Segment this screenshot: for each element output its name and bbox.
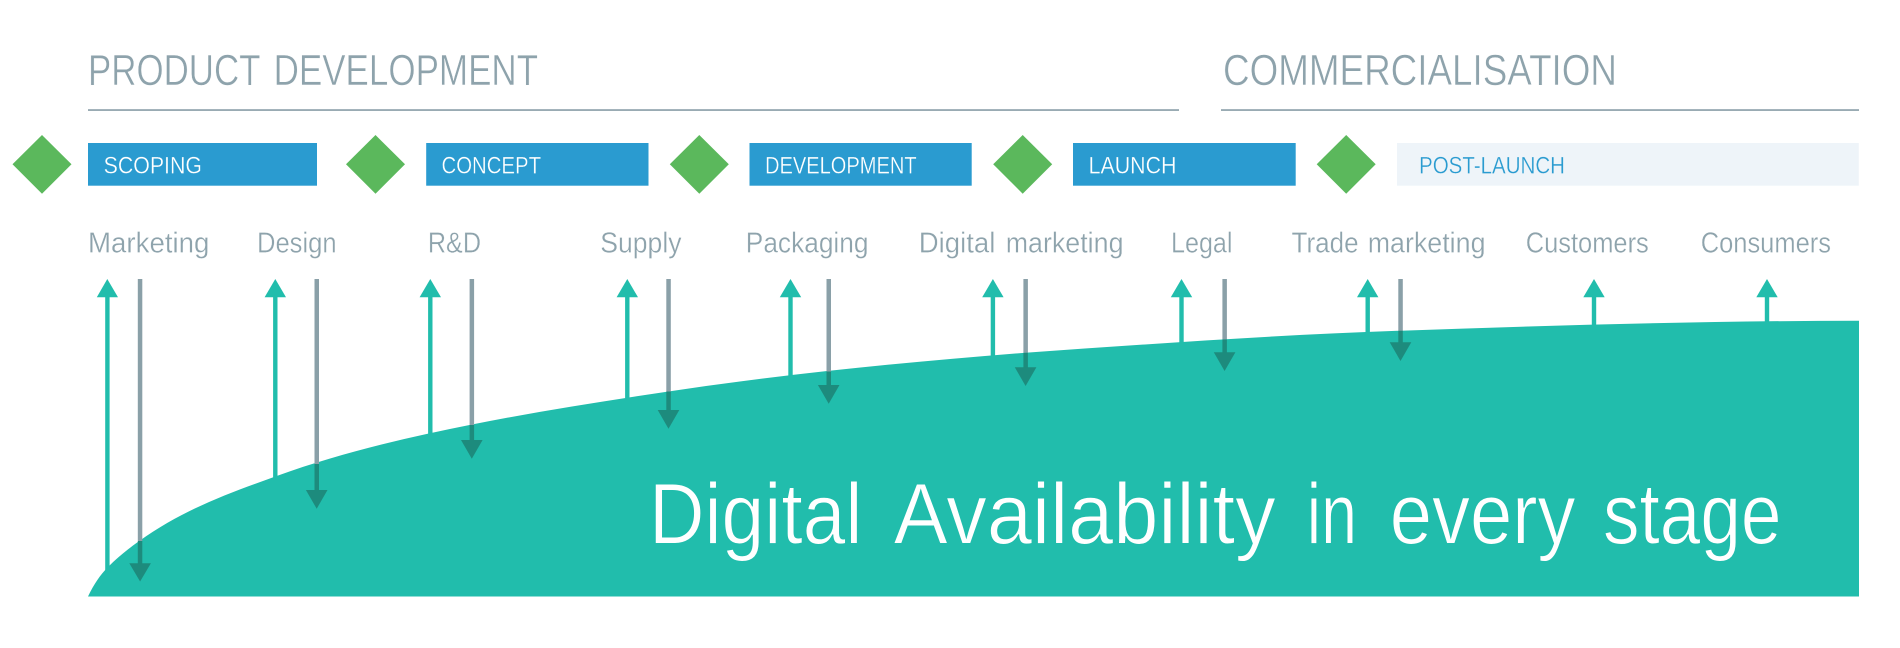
- icon: diamond gate 4: [993, 135, 1052, 194]
- label: design: Design: [257, 228, 337, 260]
- label: digital marketing: Digital: [919, 228, 995, 260]
- main statement: digital availability in every stage: Availability: [894, 466, 1276, 562]
- down arrow: marketing: [129, 279, 151, 582]
- up arrow: supply: [617, 279, 638, 402]
- icon: diamond gate 3: [670, 135, 729, 194]
- up arrow: consumers: [1756, 279, 1778, 325]
- down arrow: design: [306, 279, 328, 509]
- up arrow: trade marketing: [1357, 279, 1378, 336]
- main statement: digital availability in every stage: [649, 466, 1782, 562]
- heading: product development: DEVELOPMENT: [274, 47, 538, 95]
- stage bar: development: DEVELOPMENT: [765, 152, 917, 179]
- up arrow: marketing: [97, 279, 118, 572]
- stage bar: post-launch: [1397, 143, 1859, 186]
- down arrow: R&D: [461, 279, 483, 459]
- up arrow: legal: [1171, 279, 1192, 346]
- down arrow: packaging: [818, 279, 840, 404]
- label: packaging: Packaging: [746, 228, 868, 260]
- label: supply: Supply: [600, 228, 682, 260]
- stage bar: development: [750, 143, 972, 186]
- label: consumers: Consumers: [1701, 228, 1831, 260]
- stage bar: launch: [1073, 143, 1296, 186]
- area chart: digital availability curve: [88, 321, 1859, 596]
- heading: commercialisation: COMMERCIALISATION: [1223, 47, 1617, 95]
- label: digital marketing: [919, 228, 1124, 260]
- heading: product development: [88, 47, 1179, 111]
- heading: product development: PRODUCT: [88, 47, 260, 95]
- icon: diamond gate 1: [12, 135, 72, 194]
- label: trade marketing: Trade: [1292, 228, 1359, 260]
- stage bar: post-launch: POST-LAUNCH: [1419, 152, 1565, 179]
- label: R&D: R&D: [428, 228, 481, 260]
- label: trade marketing: [1292, 228, 1486, 260]
- down arrow: legal: [1214, 279, 1235, 371]
- down arrow: trade marketing: [1390, 279, 1411, 361]
- up arrow: customers: [1583, 279, 1605, 328]
- up arrow: digital marketing: [982, 279, 1004, 360]
- label: trade marketing: marketing: [1368, 228, 1486, 260]
- label: marketing: Marketing: [88, 228, 209, 260]
- main statement: digital availability in every stage: Digital: [649, 466, 862, 562]
- icon: diamond gate 2: [346, 135, 405, 194]
- up arrow: packaging: [780, 279, 801, 380]
- stage bar: scoping: [88, 143, 317, 186]
- stage bar: launch: LAUNCH: [1089, 152, 1176, 179]
- main statement: digital availability in every stage: stage: [1603, 466, 1782, 562]
- stage bar: concept: [426, 143, 648, 186]
- down arrow: supply: [658, 279, 679, 429]
- label: digital marketing: marketing: [1006, 228, 1124, 260]
- main statement: digital availability in every stage: in: [1307, 466, 1357, 562]
- up arrow: R&D: [420, 279, 441, 438]
- label: customers: Customers: [1526, 228, 1649, 260]
- stage bar: concept: CONCEPT: [442, 152, 541, 179]
- main statement: digital availability in every stage: every: [1390, 466, 1576, 562]
- label: legal: Legal: [1171, 228, 1232, 260]
- up arrow: design: [265, 279, 286, 481]
- stage bar: scoping: SCOPING: [104, 152, 202, 179]
- down arrow: digital marketing: [1015, 279, 1036, 386]
- icon: diamond gate 5: [1317, 135, 1376, 194]
